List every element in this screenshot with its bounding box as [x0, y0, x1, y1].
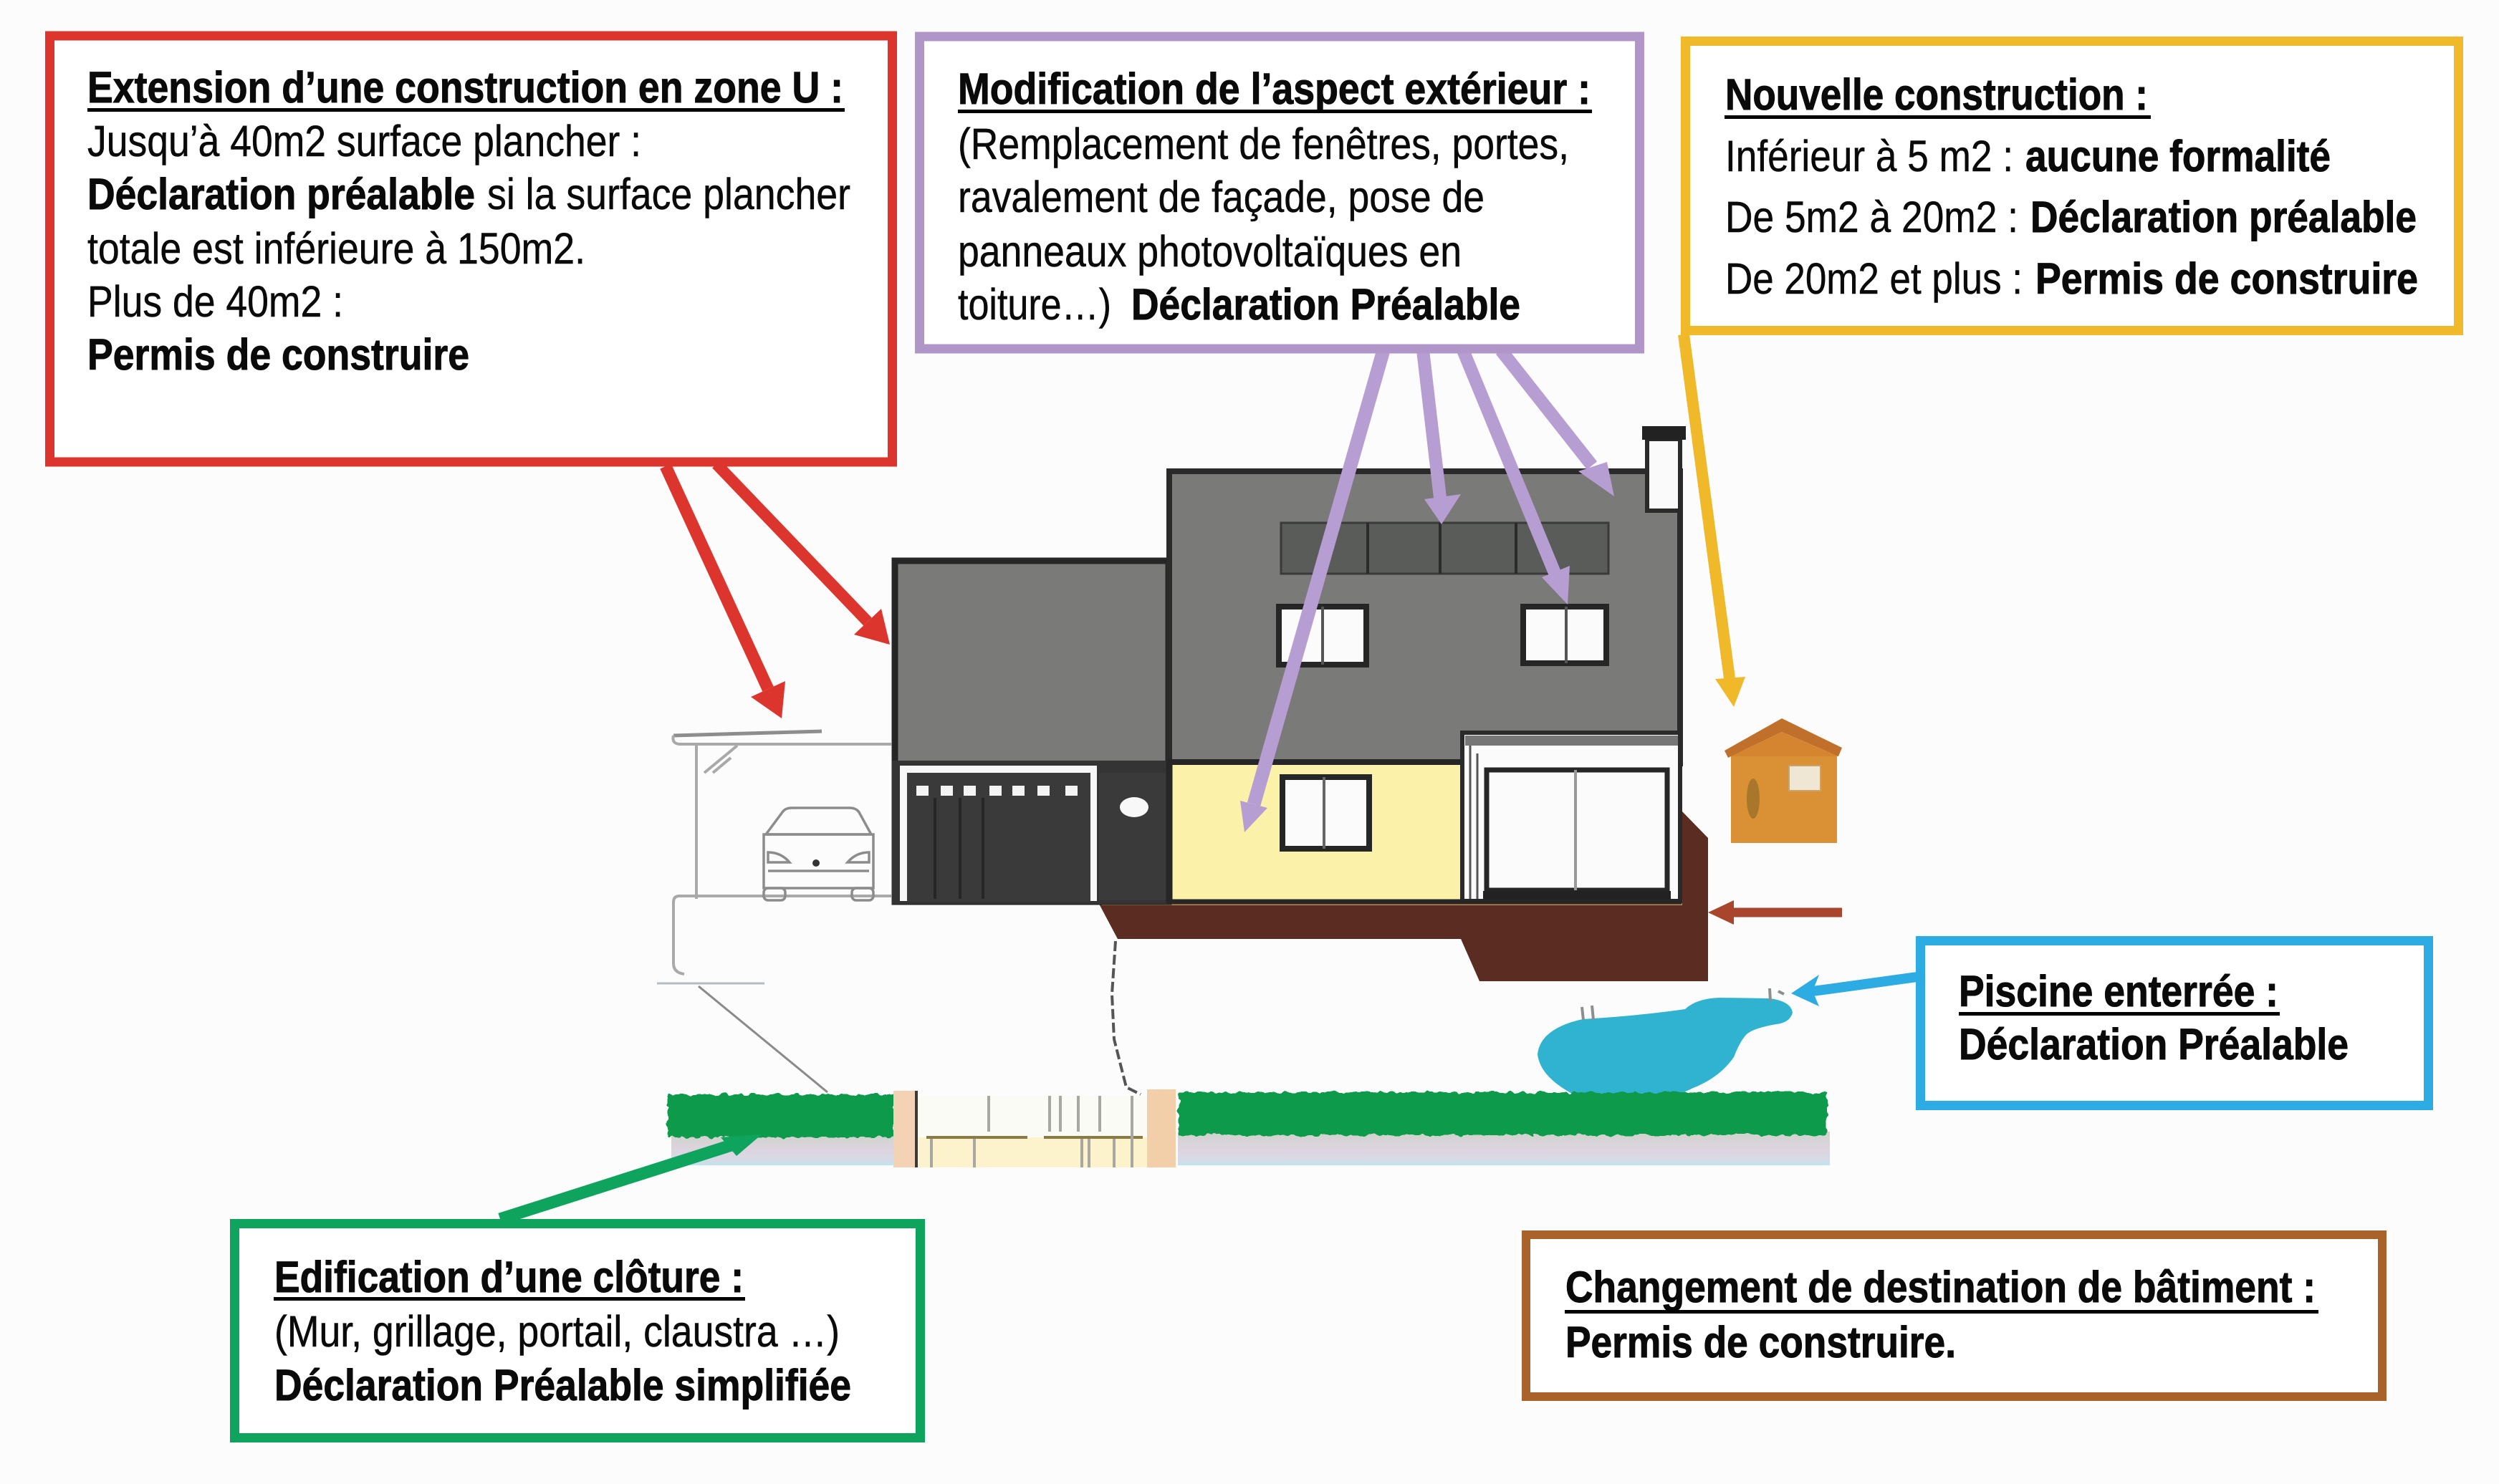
text block: extension rules: si la surface plancher [487, 170, 850, 218]
wooden deck [1099, 811, 1708, 981]
text block: new construction thresholds: Inférieur à 5 m2 : [1725, 132, 2013, 180]
panel: new construction [1685, 42, 2459, 331]
text block: fence details: Déclaration Préalable simplifiée [274, 1361, 851, 1410]
chimney [1642, 426, 1686, 511]
heading: change of use: Changement de destination de bâtiment : [1565, 1263, 2316, 1311]
text block: extension rules: totale est inférieure à 150m2. [87, 224, 585, 273]
bay with sliding door [1462, 733, 1680, 901]
text block: extension rules: Jusqu’à 40m2 surface plancher : [87, 117, 641, 165]
text block: exterior modification details [958, 120, 1569, 329]
heading: exterior modification: Modification de l’aspect extérieur : [958, 64, 1591, 113]
house illustration [657, 426, 1708, 1094]
heading: new construction: Nouvelle construction : [1725, 70, 2148, 119]
text block: fence details [274, 1307, 851, 1410]
text block: extension rules: Permis de construire [87, 330, 469, 379]
upstairs windows [1279, 607, 1606, 665]
text block: exterior modification details: panneaux photovoltaïques en [958, 227, 1462, 276]
panel: swimming pool [1920, 941, 2429, 1106]
car [764, 808, 873, 900]
hedge right [1179, 1092, 1827, 1135]
text block: exterior modification details: toiture…) [958, 280, 1111, 329]
text block: new construction thresholds: De 5m2 à 20m2 : [1725, 193, 2018, 241]
panel: fence [235, 1223, 920, 1438]
swimming pool [1538, 988, 1793, 1097]
heading: pool: Piscine enterrée : [1959, 967, 2278, 1016]
text block: extension rules: Déclaration préalable [87, 170, 475, 218]
text block: new construction thresholds: De 20m2 et plus : [1725, 254, 2023, 303]
fence and gate [668, 1089, 1830, 1167]
upper storey roof [1169, 471, 1680, 763]
arrow: fence [500, 1134, 762, 1219]
garden shed [1725, 718, 1842, 843]
garage door [907, 773, 1090, 902]
text block: fence details: (Mur, grillage, portail, claustra …) [274, 1307, 840, 1356]
panel: extension in zone U [50, 36, 893, 462]
arrow: pool [1791, 975, 1917, 1006]
text block: pool permit: Déclaration Préalable [1959, 1020, 2349, 1069]
arrow: new construction [1684, 334, 1745, 707]
text block: exterior modification details: (Remplacement de fenêtres, portes, [958, 120, 1569, 168]
photovoltaic panels [1281, 523, 1608, 574]
text block: change of use permit: Permis de construire. [1565, 1318, 1956, 1367]
gate [893, 1089, 1176, 1167]
garden path line [1112, 941, 1141, 1094]
text block: new construction thresholds: Déclaration préalable [2030, 193, 2417, 241]
text block: new construction thresholds: aucune formalité [2025, 132, 2331, 180]
text block: new construction thresholds: Permis de construire [2035, 254, 2418, 303]
ground floor window [1282, 777, 1369, 849]
arrow: change of use [1708, 900, 1842, 925]
heading: extension: Extension d’une construction en zone U : [87, 63, 843, 112]
lower roof and garage wing [892, 561, 1169, 904]
carport and car line drawing [657, 731, 891, 1092]
text block: exterior modification details: Déclaration Préalable [1131, 280, 1520, 329]
arrows: extension [666, 464, 890, 718]
panel: exterior modification [920, 37, 1639, 349]
entry door with oval window [1099, 773, 1167, 900]
panel: change of use [1526, 1235, 2382, 1397]
text block: new construction thresholds [1725, 132, 2418, 303]
text block: exterior modification details: ravalement de façade, pose de [958, 173, 1484, 221]
text block: extension rules: Plus de 40m2 : [87, 277, 343, 326]
arrows: exterior modification [1240, 350, 1614, 832]
hedge left [668, 1094, 893, 1137]
heading: fence: Edification d’une clôture : [274, 1253, 744, 1301]
yellow facade [1169, 763, 1461, 901]
text block: extension rules [87, 117, 850, 379]
